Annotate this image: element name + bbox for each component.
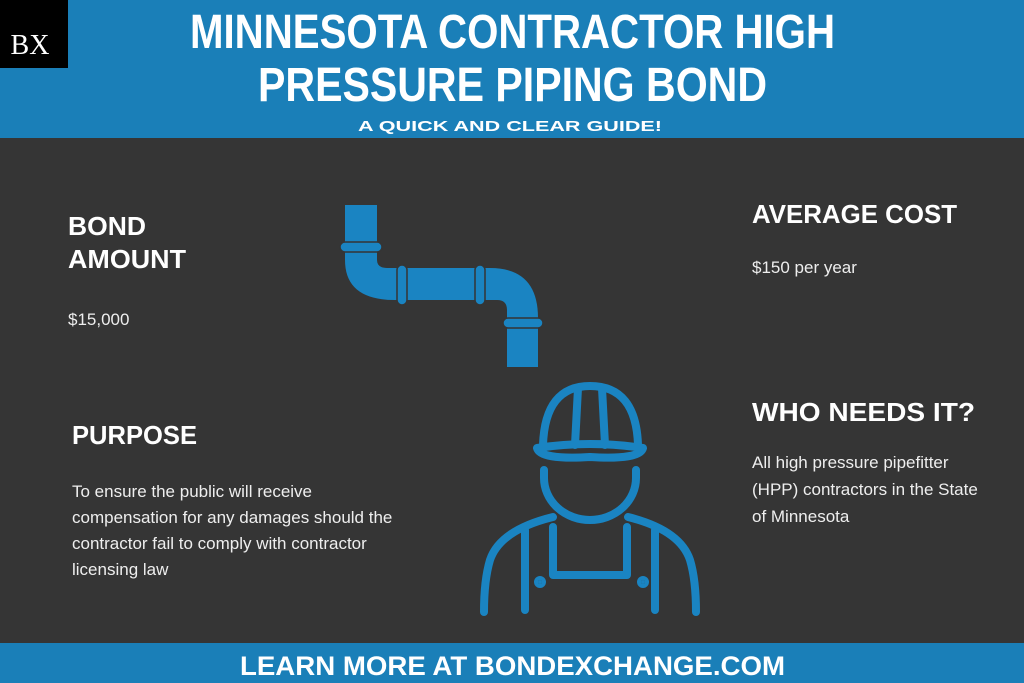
icon: worker — [484, 386, 696, 612]
panel: who needs it: WHO NEEDS IT? — [752, 397, 975, 427]
panel: purpose: compensation for any damages should the — [72, 508, 392, 527]
panel: bond amount: AMOUNT — [68, 244, 186, 274]
footer band: LEARN MORE AT BONDEXCHANGE.COM — [240, 651, 785, 681]
icon: pipe — [340, 205, 543, 367]
panel: purpose: licensing law — [72, 560, 169, 579]
panel: bond amount — [68, 211, 186, 329]
panel: purpose: PURPOSE — [72, 420, 197, 450]
title: MINNESOTA CONTRACTOR HIGH — [190, 6, 835, 59]
panel: who needs it: All high pressure pipefitter — [752, 453, 949, 472]
panel: average cost: $150 per year — [752, 258, 857, 277]
panel: who needs it: (HPP) contractors in the State — [752, 480, 978, 499]
title — [190, 6, 835, 112]
footer band — [0, 643, 1024, 683]
title: PRESSURE PIPING BOND — [258, 59, 767, 112]
panel: average cost — [752, 199, 957, 277]
panel: who needs it — [752, 397, 978, 526]
panel: average cost: AVERAGE COST — [752, 199, 957, 229]
subtitle: A QUICK AND CLEAR GUIDE! — [358, 118, 662, 135]
logo: BX — [0, 0, 68, 68]
logo: BX: BX — [11, 30, 49, 61]
panel: purpose — [72, 420, 392, 579]
panel: bond amount: $15,000 — [68, 310, 129, 329]
panel: who needs it: of Minnesota — [752, 507, 850, 526]
panel: purpose: To ensure the public will receive — [72, 482, 312, 501]
header band — [0, 0, 1024, 138]
panel: purpose: contractor fail to comply with contractor — [72, 534, 367, 553]
panel: bond amount: BOND — [68, 211, 146, 241]
